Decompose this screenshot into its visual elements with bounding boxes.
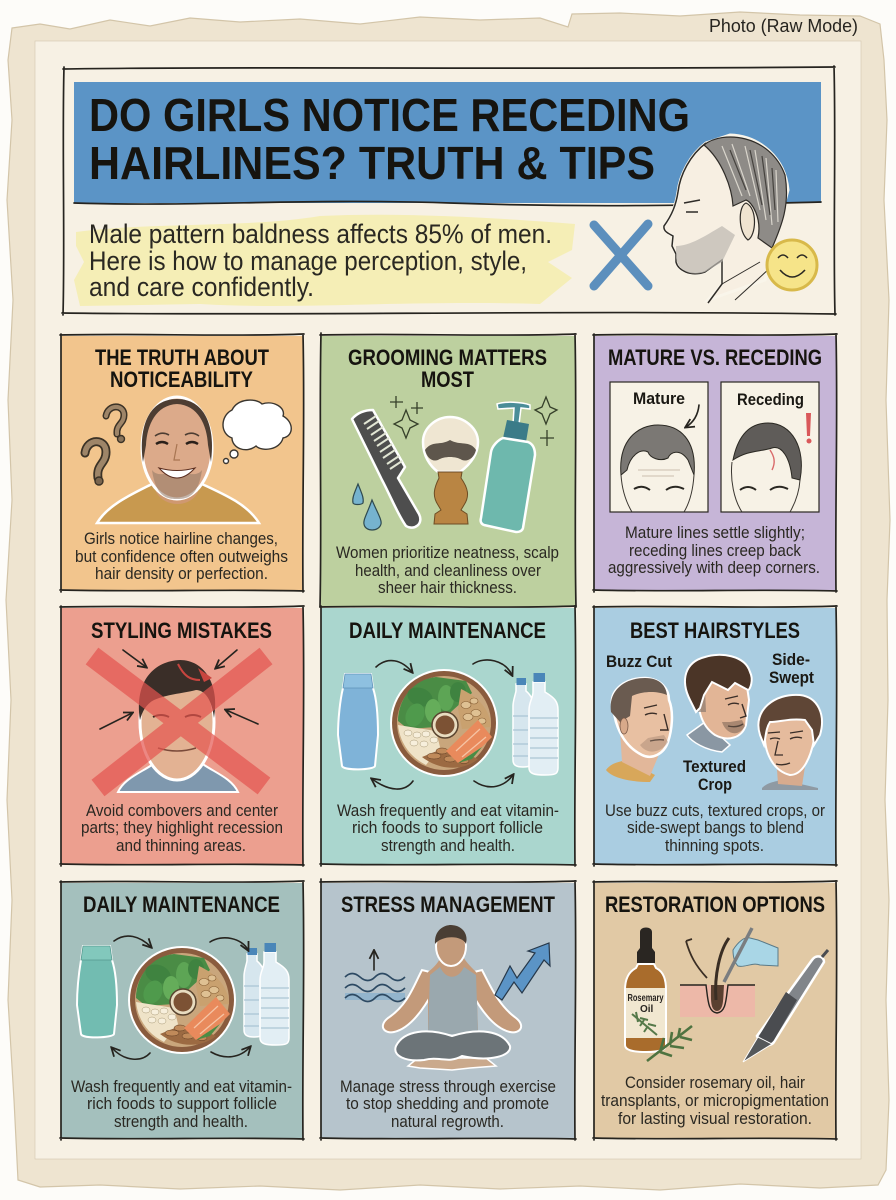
- panel: mature vs receding: MATURE VS. RECEDING: [608, 345, 822, 370]
- panel: best hairstyles: BEST HAIRSTYLES: [630, 618, 800, 643]
- panel: stress management: natural regrowth.: [391, 1113, 504, 1131]
- style labels: Side-: [772, 650, 810, 669]
- panel: daily maintenance (teal bottle): DAILY MAINTENANCE: [83, 892, 280, 917]
- icon: meditating woman: [383, 925, 521, 1070]
- panel: daily maintenance (teal bottle): rich foods to support follicle: [87, 1095, 277, 1113]
- yellow highlight: [74, 215, 575, 306]
- panel: mature vs receding: receding lines creep back: [629, 542, 802, 560]
- panel: restoration options: transplants, or micropigmentation: [601, 1092, 829, 1110]
- cycle arrows: [112, 936, 250, 1059]
- icon: pump bottle: [481, 402, 535, 532]
- subtitle: Male pattern baldness affects 85% of men.: [89, 219, 552, 249]
- panel: grooming matters most: GROOMING MATTERS: [348, 345, 547, 370]
- subtitle: [89, 219, 552, 302]
- panel: restoration options: [593, 881, 837, 1140]
- icon: rosemary oil bottle: Oil: [640, 1004, 654, 1015]
- panel: daily maintenance (blue bottle): rich foods to support follicle: [352, 819, 543, 837]
- panel: daily maintenance (blue bottle): DAILY MAINTENANCE: [349, 618, 546, 643]
- mode label: Photo (Raw Mode): [709, 16, 858, 36]
- icon: food bowl: [128, 946, 236, 1054]
- icon: shaving brush: [423, 417, 478, 524]
- icon: question marks: [85, 407, 124, 485]
- panel: grooming matters most: health, and cleanliness over: [355, 562, 541, 580]
- icon: man with comb-over: [118, 660, 238, 792]
- panel: daily maintenance (blue bottle): [320, 606, 576, 866]
- panel: daily maintenance (blue bottle): Wash frequently and eat vitamin-: [337, 802, 559, 820]
- style labels: Buzz Cut: [606, 652, 672, 671]
- icon: thought cloud: [223, 400, 291, 464]
- banner underline: [74, 201, 821, 206]
- panel: restoration options: for lasting visual restoration.: [618, 1110, 812, 1128]
- panel: grooming matters most: sheer hair thickness.: [378, 579, 517, 597]
- card: receding hairline: [721, 382, 819, 512]
- panel: best hairstyles: side-swept bangs to blend: [627, 819, 804, 837]
- panel: mature vs receding: [593, 334, 837, 592]
- panel: stress management: [320, 879, 576, 1140]
- panel: restoration options: Consider rosemary oil, hair: [625, 1074, 805, 1092]
- panel: grooming matters most: [320, 333, 576, 607]
- icon: red X: [92, 656, 266, 788]
- icon: smiling man portrait: [97, 397, 259, 523]
- panel: stress management: STRESS MANAGEMENT: [341, 892, 555, 917]
- icon: teal shampoo bottle: [77, 946, 117, 1037]
- header panel: [62, 66, 836, 315]
- icon: blue X: [594, 224, 648, 286]
- panel: styling mistakes: [60, 606, 304, 866]
- title: HAIRLINES? TRUTH & TIPS: [89, 137, 655, 189]
- panel: styling mistakes: parts; they highlight recession: [81, 819, 283, 837]
- subtitle: Here is how to manage perception, style,: [89, 246, 527, 276]
- header sketch frame: [62, 66, 836, 315]
- cycle arrows: [372, 660, 513, 789]
- panel: daily maintenance (blue bottle): strength and health.: [381, 837, 515, 855]
- title: [89, 89, 690, 189]
- panel: best hairstyles: [593, 606, 837, 866]
- panel: the truth about noticeability: Girls notice hairline changes,: [84, 530, 278, 548]
- icon: side-swept head: [758, 695, 822, 790]
- panel: restoration options: RESTORATION OPTIONS: [605, 892, 825, 917]
- panel: styling mistakes: STYLING MISTAKES: [91, 618, 272, 643]
- icon: micropigmentation pen: [743, 950, 828, 1062]
- icon: food bowl: [390, 669, 498, 777]
- card: mature hairline: Mature: [633, 389, 685, 408]
- card: mature hairline: [610, 382, 708, 512]
- panel: daily maintenance (teal bottle): [60, 881, 304, 1140]
- title: DO GIRLS NOTICE RECEDING: [89, 89, 690, 141]
- panel: the truth about noticeability: NOTICEABILITY: [110, 367, 253, 392]
- panel: the truth about noticeability: [60, 334, 304, 592]
- panel: daily maintenance (teal bottle): strength and health.: [114, 1113, 248, 1131]
- panel: mature vs receding: Mature lines settle slightly;: [625, 524, 805, 542]
- panel: the truth about noticeability: THE TRUTH ABOUT: [95, 345, 269, 370]
- icon: blue shampoo bottle: [338, 674, 378, 769]
- icon: rosemary oil bottle: Rosemary: [628, 993, 664, 1004]
- panel: daily maintenance (teal bottle): Wash frequently and eat vitamin-: [71, 1078, 292, 1096]
- panel: stress management: Manage stress through exercise: [340, 1078, 556, 1096]
- panel: styling mistakes: and thinning areas.: [116, 837, 246, 855]
- style labels: [606, 650, 814, 794]
- icon: hair transplant diagram: [680, 928, 778, 1017]
- icon: calm waves with up arrow: [345, 951, 405, 1002]
- panel: styling mistakes: Avoid combovers and center: [86, 802, 278, 820]
- icon: water bottles: [513, 673, 558, 775]
- panel: grooming matters most: Women prioritize neatness, scalp: [336, 544, 559, 562]
- panel: mature vs receding: aggressively with deep corners.: [608, 559, 820, 577]
- card: receding hairline: Receding: [737, 390, 804, 409]
- panel: stress management: to stop shedding and promote: [346, 1095, 549, 1113]
- icon: balding man profile: [664, 135, 788, 303]
- title banner: [74, 82, 821, 203]
- icon: comb: [352, 410, 420, 528]
- icon: buzz cut head: [606, 678, 672, 782]
- subtitle: and care confidently.: [89, 272, 314, 302]
- icon: water bottles: [244, 943, 289, 1045]
- icon: rosemary oil bottle: [625, 928, 692, 1061]
- icon: smiley: [767, 240, 817, 290]
- icon: inward arrows: [100, 650, 258, 729]
- panel: best hairstyles: Use buzz cuts, textured crops, or: [605, 802, 825, 820]
- icon: textured crop head: [685, 655, 752, 752]
- style labels: Swept: [769, 668, 814, 687]
- panel: grooming matters most: MOST: [421, 367, 474, 392]
- panel: best hairstyles: thinning spots.: [665, 837, 764, 855]
- icon: water drops: [353, 484, 381, 530]
- icon: sparkles: [390, 396, 557, 446]
- style labels: Crop: [698, 775, 732, 794]
- panel: the truth about noticeability: hair density or perfection.: [95, 565, 268, 583]
- style labels: Textured: [683, 757, 746, 776]
- icon: rising arrow: [495, 943, 550, 1000]
- panel: the truth about noticeability: but confidence often outweighs: [75, 548, 288, 566]
